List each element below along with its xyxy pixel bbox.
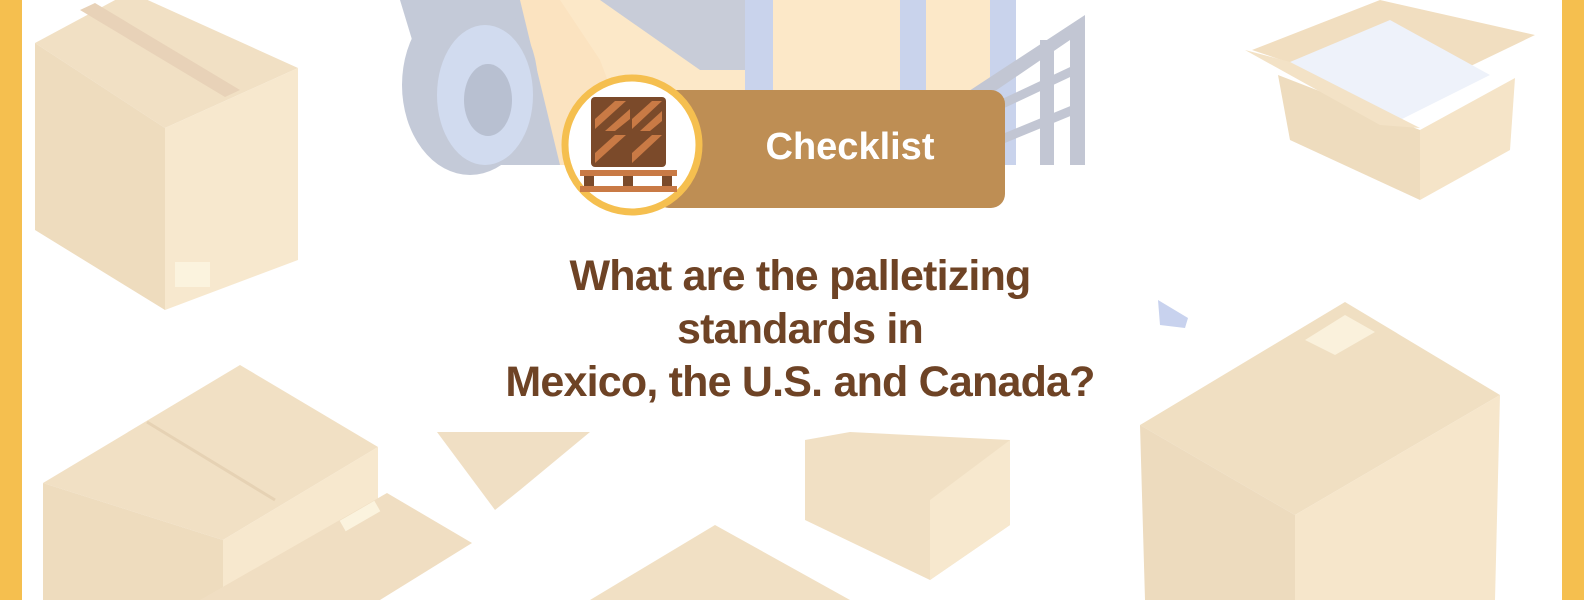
small blue piece bbox=[1158, 300, 1188, 328]
forklift bbox=[400, 0, 1085, 175]
left border bar bbox=[0, 0, 22, 600]
bottom center box bbox=[590, 525, 850, 600]
box top-left bbox=[35, 0, 298, 310]
badge label: Checklist bbox=[766, 126, 934, 168]
open box with peanuts bbox=[1245, 0, 1535, 200]
title bbox=[505, 252, 1095, 406]
title: standards in bbox=[677, 305, 923, 353]
icon: pallet in circle bbox=[562, 74, 702, 216]
right border bar bbox=[1562, 0, 1584, 600]
title: Mexico, the U.S. and Canada? bbox=[505, 358, 1095, 406]
title: What are the palletizing bbox=[569, 252, 1031, 300]
big right box bbox=[1140, 302, 1500, 600]
small flap piece bbox=[437, 432, 590, 510]
badge: checklist bbox=[655, 90, 1005, 208]
middle box bbox=[805, 432, 1010, 580]
bottom-left stacked boxes bbox=[43, 365, 472, 600]
